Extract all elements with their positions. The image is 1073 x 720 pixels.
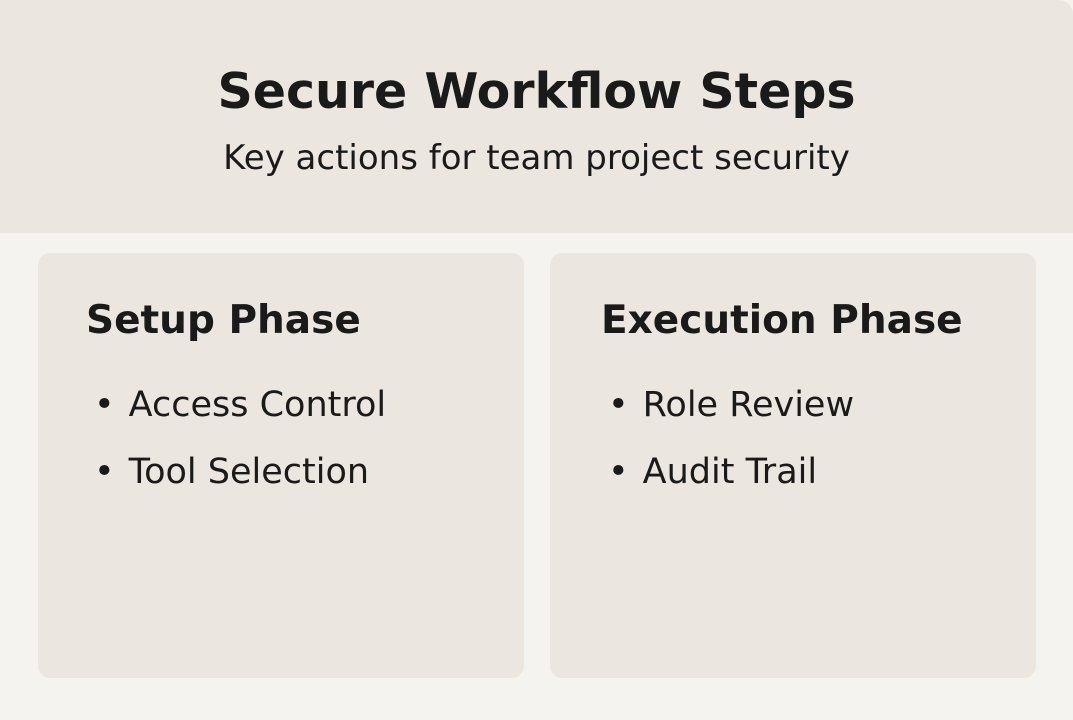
panel: setup phase [38,253,524,678]
list: execution items [613,385,854,492]
heading: execution phase: Execution Phase [601,298,963,343]
panel: execution phase [550,253,1036,678]
list: setup items: Access Control [129,385,386,425]
title: Secure Workflow Steps [217,63,856,120]
list: setup items [99,385,386,492]
heading: setup phase: Setup Phase [86,298,361,343]
list: execution items: Role Review [643,385,854,425]
header band [0,0,1073,233]
list: setup items: Tool Selection [129,452,369,492]
subtitle: Key actions for team project security [223,138,850,178]
list: execution items: Audit Trail [643,452,817,492]
